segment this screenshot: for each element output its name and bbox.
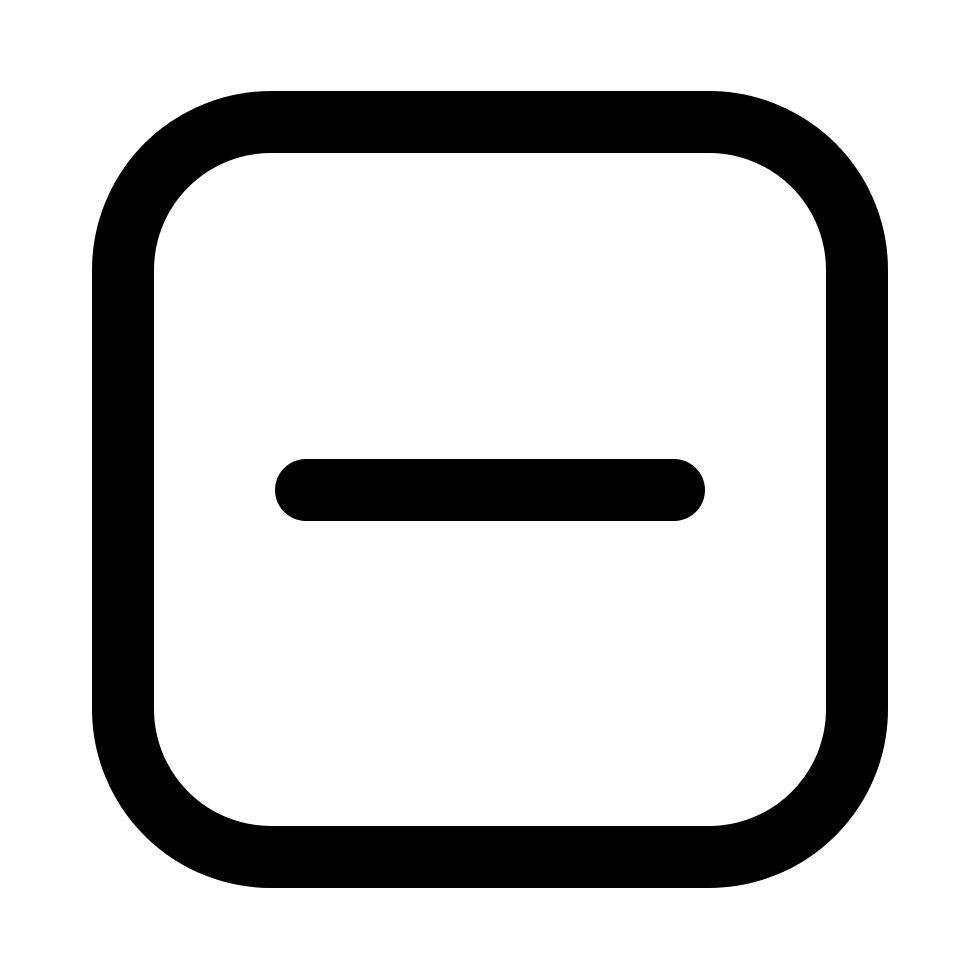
- rounded square outline: [123, 122, 857, 857]
- minus sign: [275, 459, 705, 521]
